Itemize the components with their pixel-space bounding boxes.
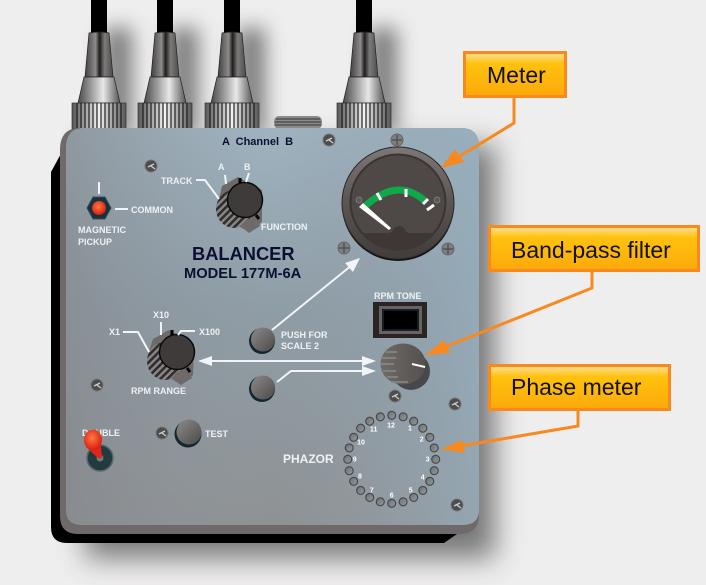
phazor: 2 xyxy=(420,436,424,444)
connectors xyxy=(72,0,391,129)
phazor: 8 xyxy=(358,474,362,480)
RPM range knob: X1 xyxy=(109,327,120,337)
toggle switch xyxy=(82,428,120,471)
phazor: 10 xyxy=(357,440,365,446)
callout: band-pass filter: Band-pass filter xyxy=(511,237,671,263)
function knob: A xyxy=(218,162,225,172)
title: BALANCER xyxy=(192,243,295,264)
phazor xyxy=(283,411,440,507)
phazor: 4 xyxy=(421,474,425,482)
magnetic pickup jack: PICKUP xyxy=(78,237,112,247)
RPM range knob: RPM RANGE xyxy=(131,386,186,396)
heading: channel: A Channel B xyxy=(222,136,293,148)
phazor: 1 xyxy=(408,426,412,432)
function knob: TRACK xyxy=(161,176,193,186)
phazor: 11 xyxy=(370,426,378,434)
function knob: FUNCTION xyxy=(261,222,308,232)
phazor: 9 xyxy=(353,456,357,464)
function knob: B xyxy=(244,162,251,172)
RPM range knob: X10 xyxy=(153,310,169,320)
device shadow xyxy=(85,28,495,558)
phazor: 3 xyxy=(426,456,430,464)
push buttons xyxy=(174,328,328,448)
function knob xyxy=(161,162,308,233)
RPM range knob: X100 xyxy=(199,327,220,337)
callout: meter: Meter xyxy=(487,62,546,88)
callout: band-pass filter xyxy=(425,226,698,355)
callout: meter xyxy=(441,52,566,168)
threaded centre connector xyxy=(274,116,322,129)
meter xyxy=(342,147,454,261)
device body xyxy=(51,128,479,543)
title: MODEL 177M-6A xyxy=(184,266,302,282)
toggle switch: DOUBLE xyxy=(82,428,120,438)
callout: phase meter: Phase meter xyxy=(511,374,642,400)
magnetic pickup jack: COMMON xyxy=(131,205,173,215)
phazor: 7 xyxy=(370,488,374,494)
phazor: 5 xyxy=(409,488,413,494)
RPM tone window xyxy=(373,291,427,338)
RPM range knob xyxy=(109,310,220,396)
magnetic pickup jack: MAGNETIC xyxy=(78,225,126,235)
phazor: 12 xyxy=(387,422,395,430)
band-pass filter knob xyxy=(380,344,430,390)
screws xyxy=(91,134,463,511)
push buttons: TEST xyxy=(205,429,229,439)
push buttons: SCALE 2 xyxy=(281,341,319,351)
RPM tone window: RPM TONE xyxy=(374,291,421,301)
push buttons: PUSH FOR xyxy=(281,330,328,340)
phazor: 6 xyxy=(390,492,394,500)
callout: phase meter xyxy=(441,366,670,453)
phazor: PHAZOR xyxy=(283,452,334,466)
title xyxy=(184,243,302,282)
magnetic pickup jack xyxy=(78,182,173,247)
white connecting arrows xyxy=(198,258,376,382)
